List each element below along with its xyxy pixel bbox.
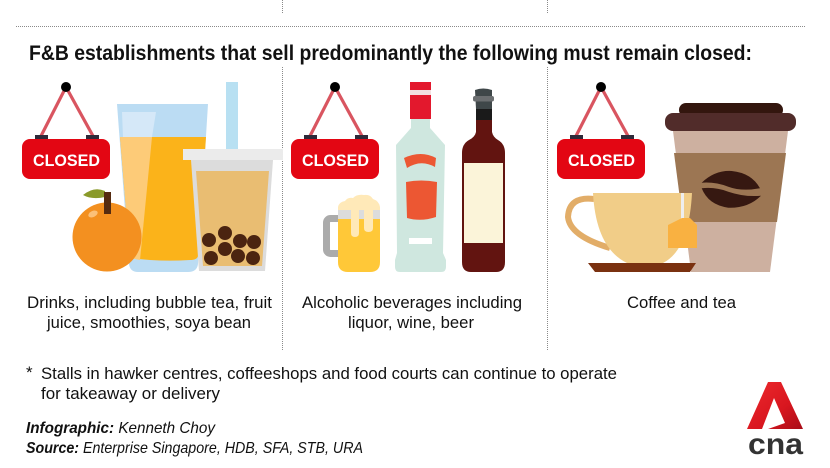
footnote	[26, 363, 617, 403]
label: drinks: juice, smoothies, soya bean	[46, 313, 251, 332]
logo: cna: cna	[748, 428, 803, 461]
icon: closed sign	[557, 82, 645, 179]
logo: cna	[747, 382, 803, 461]
credits	[26, 420, 363, 457]
label: drinks: Drinks, including bubble tea, fruit	[27, 293, 272, 312]
icon: closed sign: CLOSED	[302, 152, 369, 170]
icon: closed sign: CLOSED	[33, 152, 100, 170]
icon: closed sign	[22, 82, 110, 179]
icon: liquor bottle	[395, 82, 446, 272]
credits: Infographic: Kenneth Choy	[26, 420, 216, 437]
footnote: Stalls in hawker centres, coffeeshops and food courts can continue to operate	[41, 364, 617, 383]
label: alcohol: Alcoholic beverages including	[302, 293, 522, 312]
label: drinks	[27, 293, 272, 332]
icon: beer mug	[326, 195, 380, 272]
label: coffee and tea: Coffee and tea	[627, 293, 737, 312]
footnote: for takeaway or delivery	[41, 384, 220, 403]
label: alcohol	[302, 293, 522, 332]
icon: closed sign	[291, 82, 379, 179]
icon: juice glass	[117, 104, 208, 272]
icon: wine bottle	[462, 88, 505, 272]
label: alcohol: liquor, wine, beer	[348, 313, 474, 332]
icon: closed sign: CLOSED	[568, 152, 635, 170]
panel: coffee and tea	[557, 82, 796, 312]
panel: alcohol	[291, 82, 522, 332]
footnote: *	[26, 363, 33, 382]
icon: orange	[72, 189, 142, 272]
icon: takeaway coffee cup	[665, 103, 796, 272]
panel: drinks	[22, 82, 283, 332]
title: F&B establishments that sell predominantly the following must remain closed:	[29, 42, 752, 65]
icon: bubble tea	[183, 82, 283, 271]
credits: Source: Enterprise Singapore, HDB, SFA, STB, URA	[26, 440, 363, 457]
icon: tea cup	[568, 193, 697, 272]
